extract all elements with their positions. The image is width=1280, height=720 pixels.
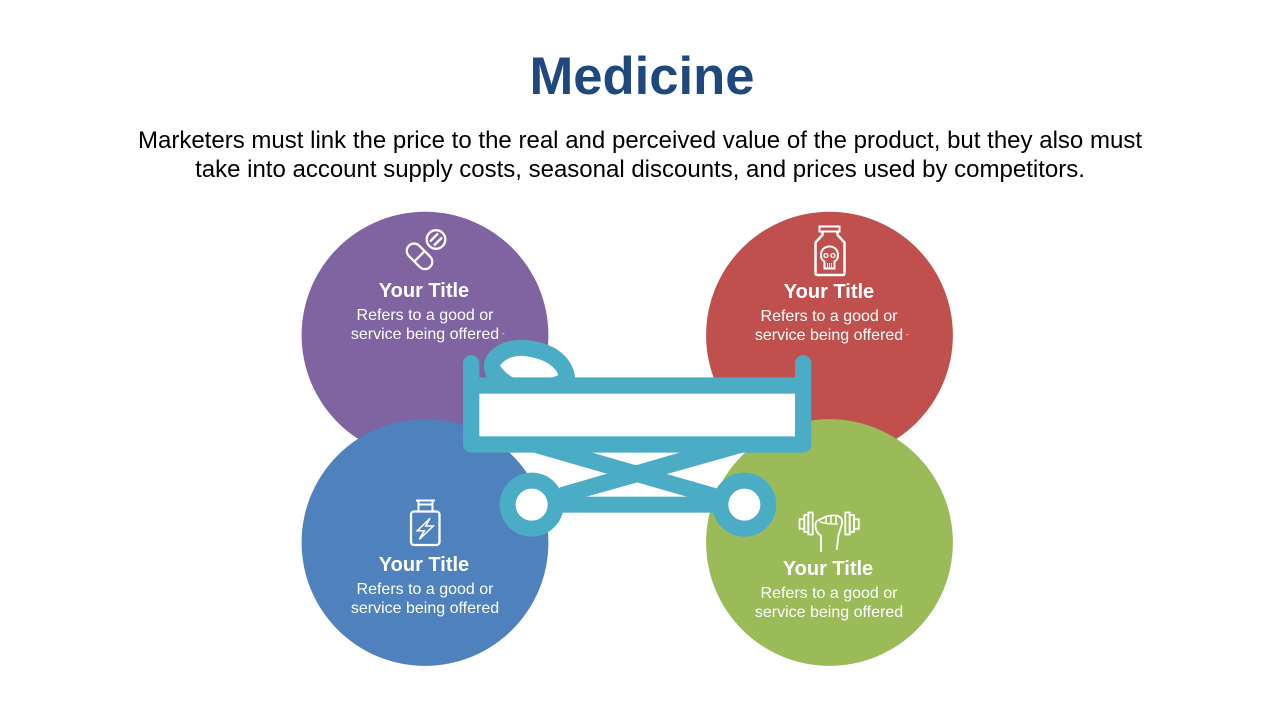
bed frame [463, 355, 811, 453]
circle: red [706, 212, 953, 459]
circle: purple [302, 212, 548, 459]
bottom bar [532, 497, 745, 513]
heading: blue: Your Title [379, 554, 469, 576]
body: red: Refers to a good or [761, 308, 897, 325]
mattress [479, 394, 795, 436]
body: green: service being offered [755, 604, 903, 621]
icon: poison bottle with skull [816, 226, 844, 275]
body: purple: Refers to a good or [357, 307, 493, 324]
text block: blue [351, 554, 499, 617]
body: green: Refers to a good or [761, 585, 897, 602]
body: purple: - [502, 329, 505, 338]
body: blue [351, 581, 499, 617]
body: blue: Refers to a good or [357, 581, 493, 598]
left wheel [508, 481, 556, 529]
text block: green [755, 558, 903, 621]
stretcher bed [463, 340, 811, 529]
circle: green [706, 419, 953, 666]
body: red: - [906, 330, 909, 339]
text block: red [755, 281, 909, 344]
scissor legs [532, 452, 722, 510]
icon: hand lifting dumbbell [800, 512, 859, 552]
icon: battery bottle with bolt [411, 500, 440, 545]
icon: pills [404, 230, 445, 272]
text block: purple [351, 280, 505, 343]
body: green [755, 585, 903, 621]
heading: green: Your Title [783, 558, 873, 580]
intro text: Marketers must link the price to the real and perceived value of the product, but they also must [138, 127, 1142, 154]
heading: purple: Your Title [379, 280, 469, 302]
body: red [755, 308, 909, 344]
intro text [138, 127, 1142, 183]
title: Medicine [529, 47, 755, 106]
pillow [484, 340, 575, 380]
right wheel [720, 481, 768, 529]
body: red: service being offered [755, 327, 903, 344]
body: purple: service being offered [351, 326, 499, 343]
heading: red: Your Title [784, 281, 874, 303]
body: blue: service being offered [351, 600, 499, 617]
body: purple [351, 307, 505, 343]
intro text: take into account supply costs, seasonal discounts, and prices used by competitors. [195, 156, 1085, 183]
circle: blue [302, 419, 548, 666]
